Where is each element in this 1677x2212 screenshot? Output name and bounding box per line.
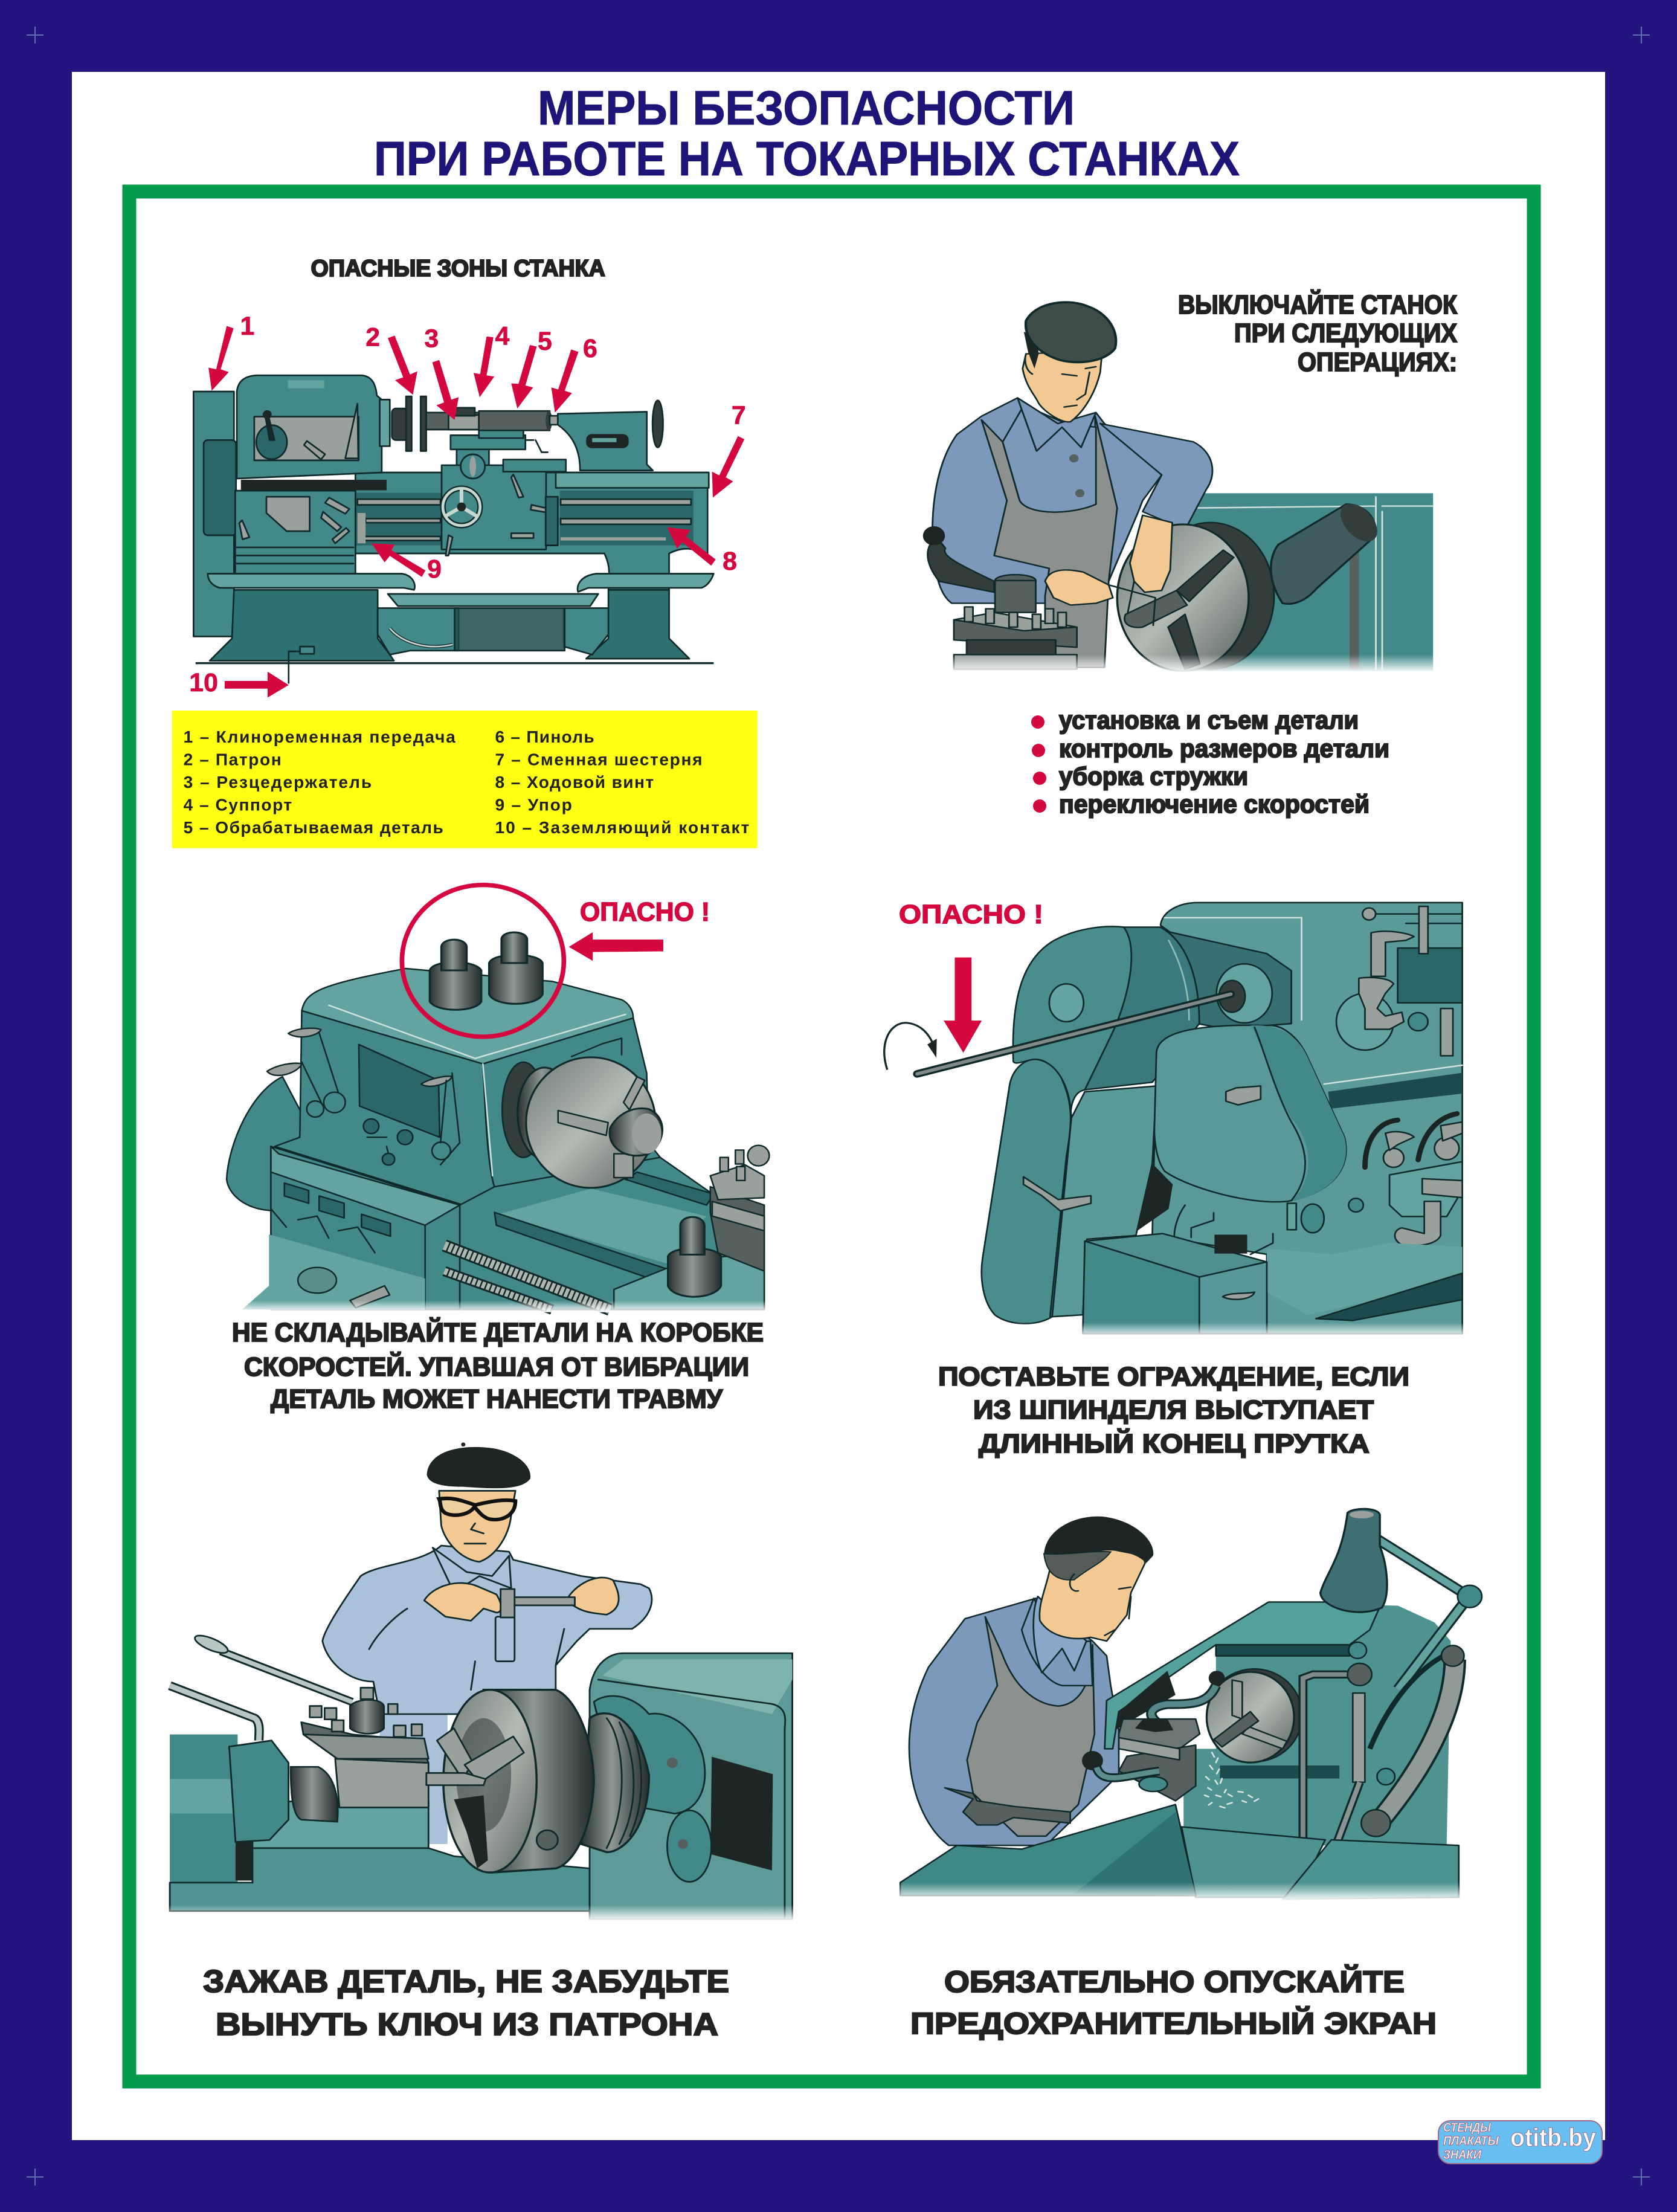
number labels: 6 <box>583 334 597 363</box>
arrow 10 <box>225 672 289 698</box>
arrow 8 <box>667 527 716 566</box>
number labels: 7 <box>732 401 746 430</box>
badge: otitb.by: СТЕНДЫ <box>1443 2121 1492 2135</box>
bullet list of operations: переключение скоростей <box>1059 790 1370 818</box>
legend box: 6 – Пиноль <box>495 727 594 746</box>
badge: otitb.by: otitb.by <box>1510 2123 1597 2152</box>
arrow 3 <box>433 360 459 420</box>
workpiece on bed <box>668 1217 721 1297</box>
chuck and calipers <box>1109 523 1274 671</box>
bottom fade <box>225 1300 772 1312</box>
panel: do not put parts on gearbox illustration <box>225 885 772 1312</box>
bottom fade <box>896 1883 1463 1901</box>
number labels: 4 <box>495 321 510 350</box>
caption: do not stack parts: СКОРОСТЕЙ. УПАВШАЯ ОТ ВИБРАЦИИ <box>244 1351 749 1382</box>
danger circle <box>402 885 564 1037</box>
danger arrow down <box>944 958 982 1053</box>
guard latch <box>1023 1177 1091 1211</box>
number labels: 2 <box>365 323 380 352</box>
safety screen <box>1105 1602 1450 1845</box>
worker with goggles <box>323 1442 652 1844</box>
bullet list of operations: уборка стружки <box>1059 762 1248 790</box>
panel: protruding bar illustration <box>884 903 1467 1338</box>
machine bed <box>900 1805 1459 1899</box>
legend box: 10 – Заземляющий контакт <box>495 818 749 837</box>
panel: dangerous zones of the lathe <box>172 256 758 848</box>
tool post <box>1082 1719 1200 1801</box>
number labels: 10 <box>189 668 218 697</box>
chuck with key seat <box>426 1690 649 1872</box>
title: МЕРЫ БЕЗОПАСНОСТИ <box>538 81 1075 135</box>
machine bed <box>170 1686 590 1911</box>
danger label left: ОПАСНО ! <box>580 897 710 927</box>
badge: otitb.by: ЗНАКИ <box>1443 2148 1482 2162</box>
panel: switch off the lathe illustration <box>923 302 1440 673</box>
panel: remove chuck key illustration <box>166 1442 797 1921</box>
caption: remove key <box>203 1964 729 2042</box>
green frame <box>129 192 1534 2081</box>
caption: install guard: ПОСТАВЬТЕ ОГРАЖДЕНИЕ, ЕСЛИ <box>938 1362 1409 1391</box>
coolant pipe and lamp arm <box>1303 1509 1482 1868</box>
legend box: 8 – Ходовой винт <box>495 773 654 792</box>
bottom fade <box>930 654 1440 673</box>
coolant box <box>1083 1234 1267 1333</box>
caption: install guard: ДЛИННЫЙ КОНЕЦ ПРУТКА <box>979 1428 1370 1459</box>
legend box: 3 – Резцедержатель <box>184 773 372 792</box>
arrow 2 <box>388 336 417 395</box>
legend box: 4 – Суппорт <box>184 795 292 814</box>
chuck <box>502 1057 662 1188</box>
legend box: 1 – Клиноременная передача <box>184 727 455 746</box>
number labels: 1 <box>240 312 254 341</box>
arrow 7 <box>712 436 744 498</box>
legend box: 9 – Упор <box>495 795 572 814</box>
title: ПРИ РАБОТЕ НА ТОКАРНЫХ СТАНКАХ <box>374 132 1240 185</box>
headstock <box>267 969 660 1205</box>
rotation arrow <box>884 1023 937 1070</box>
heading: switch off the lathe: ВЫКЛЮЧАЙТЕ СТАНОК <box>1178 289 1457 320</box>
badge: otitb.by: ПЛАКАТЫ <box>1443 2134 1499 2148</box>
caption: lower the screen: ПРЕДОХРАНИТЕЛЬНЫЙ ЭКРАН <box>910 2006 1437 2040</box>
caption: install guard: ИЗ ШПИНДЕЛЯ ВЫСТУПАЕТ <box>973 1395 1374 1425</box>
caption: do not stack parts: НЕ СКЛАДЫВАЙТЕ ДЕТАЛИ НА КОРОБКЕ <box>232 1317 764 1347</box>
arrow 4 <box>474 337 494 397</box>
bullet list of operations: установка и съем детали <box>1059 706 1359 734</box>
bottom fade <box>166 1905 797 1921</box>
number labels: 5 <box>538 327 552 356</box>
caption: lower the screen: ОБЯЗАТЕЛЬНО ОПУСКАЙТЕ <box>944 1964 1405 1999</box>
recess and spindle <box>1165 931 1292 1027</box>
heading: switch off the lathe: ПРИ СЛЕДУЮЩИХ <box>1234 318 1457 348</box>
title <box>374 81 1240 185</box>
bottom fade <box>980 1323 1467 1338</box>
arrow 9 <box>372 543 425 577</box>
metal chips <box>1205 1752 1258 1808</box>
fitting brackets <box>1174 1205 1273 1254</box>
number labels: 9 <box>427 555 442 584</box>
panel: lower safety screen illustration <box>896 1509 1482 1901</box>
legend box: 7 – Сменная шестерня <box>495 750 703 769</box>
arrow 5 <box>511 345 537 408</box>
heading: switch off the lathe <box>1178 289 1457 377</box>
chuck <box>1151 1669 1339 1779</box>
headstock body <box>1152 903 1463 1333</box>
lathe illustration <box>193 375 713 683</box>
heading: switch off the lathe: ОПЕРАЦИЯХ: <box>1298 347 1457 377</box>
workpieces on gearbox <box>430 932 542 1010</box>
tool post <box>923 526 1077 669</box>
bed and screws <box>242 1146 764 1310</box>
number labels <box>189 312 746 697</box>
tool post <box>710 1146 769 1271</box>
worker with apron <box>909 1517 1153 1845</box>
danger label right: ОПАСНО ! <box>899 900 1043 929</box>
caption: install guard <box>938 1362 1409 1459</box>
caption: lower the screen <box>910 1964 1437 2040</box>
caption: do not stack parts <box>232 1317 764 1414</box>
legend box <box>172 711 758 848</box>
legend box: 2 – Патрон <box>184 750 282 769</box>
gears <box>594 1696 712 1881</box>
caption: remove key: ЗАЖАВ ДЕТАЛЬ, НЕ ЗАБУДЬТЕ <box>203 1964 729 1999</box>
gear cover <box>1154 1025 1346 1202</box>
number labels: 8 <box>723 547 737 576</box>
danger arrow <box>569 932 663 961</box>
badge: otitb.by <box>1438 2121 1602 2164</box>
caption: remove key: ВЫНУТЬ КЛЮЧ ИЗ ПАТРОНА <box>216 2007 718 2042</box>
belt guard <box>982 926 1199 1324</box>
heading: dangerous zones: ОПАСНЫЕ ЗОНЫ СТАНКА <box>311 256 605 282</box>
bullet list of operations <box>1031 706 1389 818</box>
headstock block <box>590 1653 793 1919</box>
protruding bar <box>917 994 1231 1074</box>
hand over chuck <box>1130 515 1173 592</box>
long lever <box>193 1632 352 1702</box>
bullet list of operations: контроль размеров детали <box>1059 734 1389 763</box>
machine background <box>1181 493 1433 671</box>
number labels: 3 <box>424 324 439 353</box>
lamp <box>1271 498 1385 669</box>
caption: do not stack parts: ДЕТАЛЬ МОЖЕТ НАНЕСТИ ТРАВМУ <box>271 1384 723 1414</box>
arrow 1 <box>208 326 234 391</box>
worker <box>932 302 1212 668</box>
legend box: 5 – Обрабатываемая деталь <box>184 818 443 837</box>
belt guard <box>227 1077 306 1211</box>
tail cross slide <box>229 1688 428 1842</box>
arrow 6 <box>552 349 579 413</box>
